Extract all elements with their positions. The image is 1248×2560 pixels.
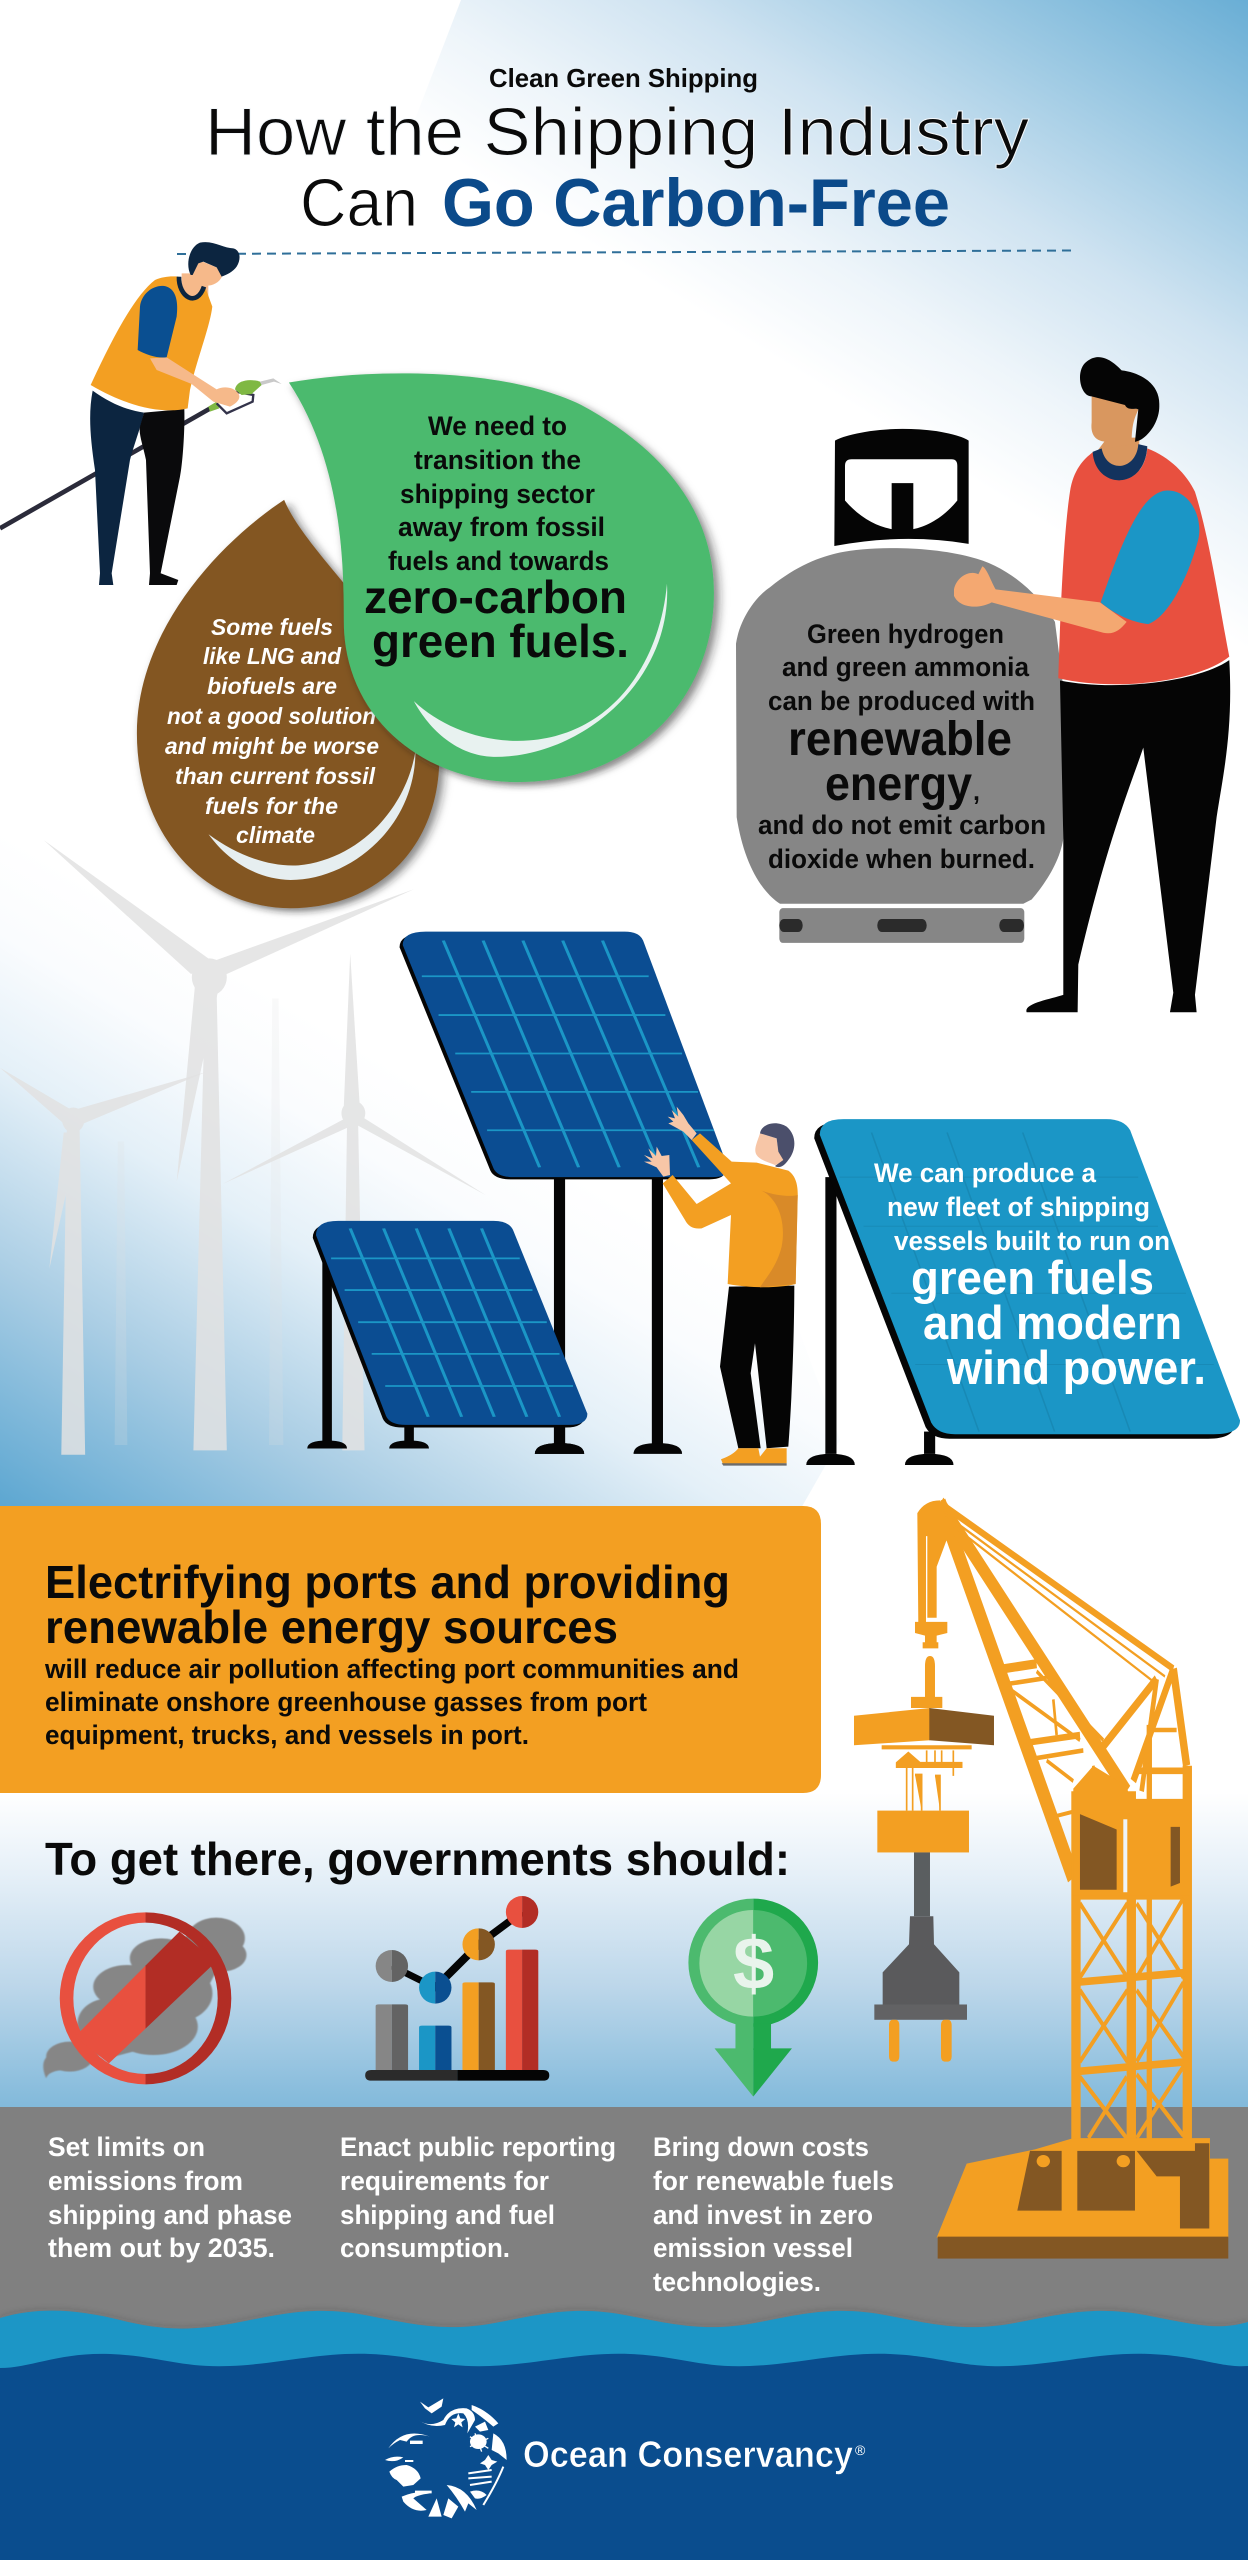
- cylinder text: and green ammonia: [782, 652, 1030, 682]
- cylinder text: and do not emit carbon: [758, 810, 1046, 840]
- droplet text: like LNG and: [203, 643, 342, 669]
- logo wordmark: Ocean Conservancy: [523, 2434, 853, 2475]
- droplet text: [364, 411, 629, 667]
- column 1: emissions from: [48, 2166, 243, 2196]
- droplet text: than current fossil: [175, 763, 376, 789]
- icon: falling cost: $: [733, 1922, 774, 2005]
- sign text: green fuels: [911, 1251, 1154, 1304]
- sign text: and modern: [923, 1296, 1182, 1349]
- brown droplet: [137, 500, 439, 908]
- crane with plug: [854, 1500, 1228, 2259]
- panel heading: Electrifying ports and providing: [45, 1556, 730, 1608]
- action text columns: [48, 2132, 894, 2297]
- cylinder text: dioxide when burned.: [768, 844, 1035, 874]
- cylinder text: ,: [973, 778, 980, 806]
- cylinder shape: [736, 429, 1063, 943]
- icon: falling cost: [688, 1899, 818, 2097]
- droplet shape: [289, 373, 714, 782]
- sign text: vessels built to run on: [894, 1226, 1170, 1256]
- dashed divider: [177, 250, 1072, 254]
- droplet text: We need to: [428, 411, 567, 441]
- droplet text: away from fossil: [398, 512, 605, 542]
- sign text: [874, 1158, 1206, 1394]
- person at solar panel: [644, 1107, 798, 1466]
- registered mark: ®: [855, 2442, 866, 2458]
- droplet text: transition the: [414, 445, 581, 475]
- droplet shape: [137, 500, 439, 908]
- cylinder text: energy: [825, 758, 972, 811]
- column 2: consumption.: [340, 2233, 510, 2263]
- droplet text: and might be worse: [165, 733, 379, 759]
- cylinder text: can be produced with: [768, 686, 1035, 716]
- column 2: Enact public reporting: [340, 2132, 616, 2162]
- column 2: [340, 2132, 616, 2263]
- large solar panel: [400, 932, 728, 1454]
- light wave: [0, 2311, 1248, 2400]
- sign text: new fleet of shipping: [887, 1192, 1150, 1222]
- title line 2: Can: [300, 165, 418, 241]
- droplet text: not a good solution: [167, 703, 376, 729]
- column 3: and invest in zero: [653, 2200, 873, 2230]
- panel body: [44, 1654, 739, 1750]
- panel body: will reduce air pollution affecting port communities and: [44, 1654, 739, 1684]
- droplet text: shipping sector: [400, 479, 595, 509]
- column 1: Set limits on: [48, 2132, 205, 2162]
- green droplet: [289, 373, 714, 782]
- sign text: We can produce a: [874, 1158, 1097, 1188]
- droplet text: zero-carbon: [364, 571, 627, 623]
- droplet text: climate: [236, 822, 315, 848]
- droplet text: fuels for the: [205, 793, 338, 819]
- cylinder text: renewable: [788, 713, 1012, 766]
- gas cylinder: [736, 429, 1063, 943]
- column 3: emission vessel: [653, 2233, 853, 2263]
- column 3: Bring down costs: [653, 2132, 869, 2162]
- logo ring: [385, 2398, 507, 2518]
- title line 2: Go Carbon-Free: [442, 165, 950, 241]
- panel body: equipment, trucks, and vessels in port.: [45, 1720, 529, 1750]
- small solar panel: [307, 1221, 587, 1454]
- title line 1: How the Shipping Industry: [205, 94, 1029, 170]
- column 3: [653, 2132, 894, 2297]
- panel heading line 2: renewable energy sources: [45, 1601, 618, 1653]
- dark footer: [0, 2354, 1248, 2560]
- column 2: requirements for: [340, 2166, 549, 2196]
- icon: no emissions: [43, 1912, 246, 2084]
- column 3: technologies.: [653, 2267, 821, 2297]
- grey band: [0, 2107, 1248, 2347]
- title block: [205, 63, 1029, 241]
- icon: bar chart: [365, 1896, 549, 2081]
- kicker: Clean Green Shipping: [489, 63, 758, 93]
- logo: Ocean Conservancy: [385, 2398, 866, 2518]
- sub-heading: To get there, governments should:: [45, 1833, 790, 1885]
- column 1: [48, 2132, 292, 2263]
- sign board: [806, 1119, 1240, 1465]
- column 2: shipping and fuel: [340, 2200, 555, 2230]
- blue sign panel: [806, 1119, 1240, 1465]
- cylinder text: Green hydrogen: [807, 619, 1004, 649]
- panel body: eliminate onshore greenhouse gasses from port: [45, 1687, 647, 1717]
- droplet text: Some fuels: [211, 614, 333, 640]
- wind turbines: [0, 840, 485, 1455]
- person with fuel nozzle: [0, 242, 282, 585]
- person holding cylinder: [954, 357, 1230, 1012]
- droplet text: [165, 614, 379, 848]
- column 1: them out by 2035.: [48, 2233, 275, 2263]
- droplet text: biofuels are: [207, 673, 337, 699]
- orange panel: electrifying ports: [0, 1506, 821, 1793]
- droplet text: fuels and towards: [388, 546, 609, 576]
- column 1: shipping and phase: [48, 2200, 292, 2230]
- cylinder text: [758, 619, 1046, 874]
- water waves and footer: [0, 2311, 1248, 2560]
- droplet text: green fuels.: [372, 615, 629, 667]
- solar panels: [307, 932, 728, 1454]
- column 3: for renewable fuels: [653, 2166, 894, 2196]
- sign text: wind power.: [946, 1341, 1206, 1394]
